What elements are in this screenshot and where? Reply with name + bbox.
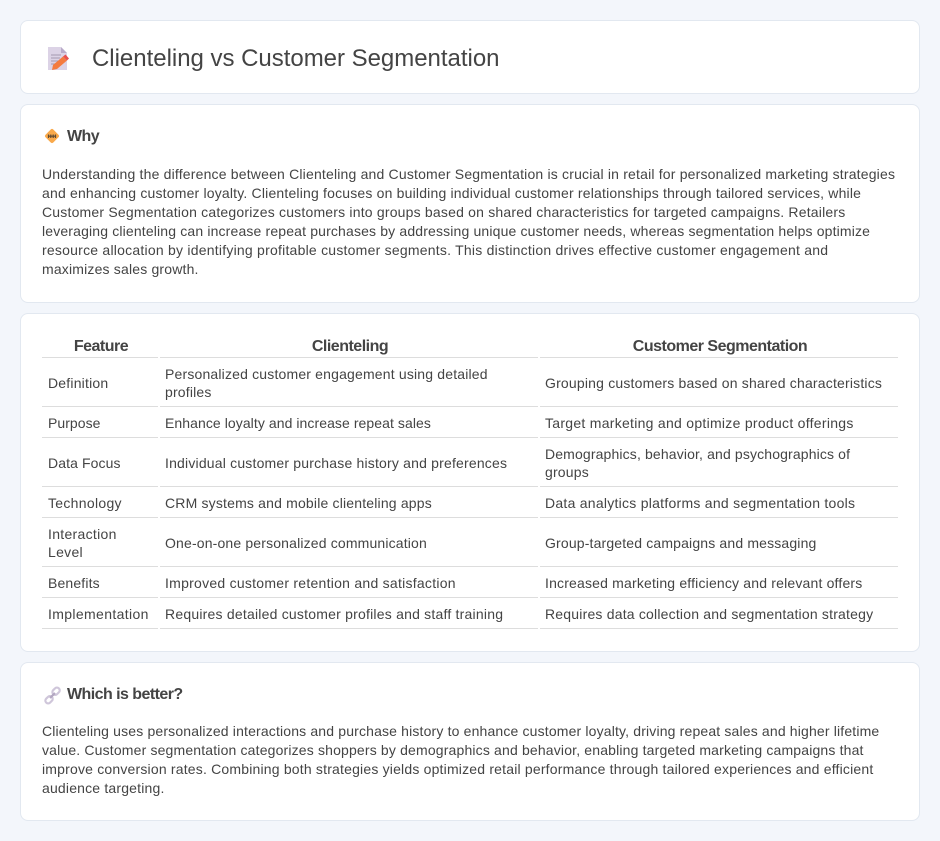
row: benefits: Benefits — [48, 575, 100, 591]
row: interaction level: Group-targeted campaigns and messaging — [545, 535, 816, 551]
row: purpose: Purpose — [48, 415, 100, 431]
panel: why — [20, 104, 920, 303]
row: technology: CRM systems and mobile clienteling apps — [165, 495, 432, 511]
which is better paragraph: audience targeting. — [42, 780, 165, 796]
why paragraph: Understanding the difference between Clienteling and Customer Segmentation is crucial in retail for personalized marketing strategies — [42, 166, 895, 182]
row: data focus — [42, 446, 898, 487]
icon: memo with pencil — [48, 47, 69, 70]
table header row: Customer Segmentation — [633, 338, 807, 355]
why paragraph: resource allocation by identifying profitable customer segments. This distinction drives effective customer engagement and — [42, 242, 828, 258]
row: technology: Technology — [48, 495, 122, 511]
heading: which is better: Which is better? — [67, 686, 183, 703]
row: technology — [42, 495, 898, 518]
row: interaction level: Level — [48, 544, 83, 560]
row: technology: Data analytics platforms and segmentation tools — [545, 495, 855, 511]
row: interaction level: One-on-one personalized communication — [165, 535, 427, 551]
row: purpose: Enhance loyalty and increase repeat sales — [165, 415, 431, 431]
row: definition: Personalized customer engagement using detailed — [165, 366, 488, 382]
title: Clienteling vs Customer Segmentation — [92, 45, 499, 72]
row: purpose — [42, 415, 898, 438]
row: interaction level: Interaction — [48, 526, 117, 542]
which is better paragraph: value. Customer segmentation categorizes shoppers by demographics and behavior, enabling targeted marketing campaigns that — [42, 742, 864, 758]
row: purpose: Target marketing and optimize product offerings — [545, 415, 854, 431]
row: interaction level — [42, 526, 898, 567]
row: data focus: Data Focus — [48, 455, 121, 471]
why paragraph: and enhancing customer loyalty. Clienteling focuses on building individual customer relationships through tailored services, while — [42, 185, 861, 201]
panel: which is better — [20, 662, 920, 821]
icon: warning diamond — [45, 128, 59, 144]
row: implementation: Implementation — [48, 606, 149, 622]
which is better paragraph — [42, 723, 879, 796]
table header row — [42, 338, 898, 358]
why paragraph: leveraging clienteling can increase repeat purchases by addressing unique customer needs, whereas segmentation helps optimize — [42, 223, 870, 239]
row: implementation — [42, 606, 898, 629]
why paragraph: Customer Segmentation categorizes customers into groups based on shared characteristics for targeted campaigns. Retailers — [42, 204, 845, 220]
row: benefits: Increased marketing efficiency and relevant offers — [545, 575, 862, 591]
table header row: Clienteling — [312, 338, 388, 355]
panel: comparison table — [20, 313, 920, 652]
row: benefits: Improved customer retention and satisfaction — [165, 575, 456, 591]
row: implementation: Requires detailed customer profiles and staff training — [165, 606, 503, 622]
row: definition — [42, 366, 898, 407]
heading: why: Why — [67, 128, 99, 145]
row: benefits — [42, 575, 898, 598]
why paragraph: maximizes sales growth. — [42, 261, 199, 277]
which is better paragraph: improve conversion rates. Combining both strategies yields optimized retail performance through tailored experiences and efficient — [42, 761, 873, 777]
icon: link — [44, 686, 61, 704]
why paragraph — [42, 166, 895, 277]
row: definition: Definition — [48, 375, 108, 391]
row: implementation: Requires data collection and segmentation strategy — [545, 606, 873, 622]
header panel — [20, 20, 920, 94]
row: definition: Grouping customers based on shared characteristics — [545, 375, 882, 391]
row: data focus: groups — [545, 464, 589, 480]
row: data focus: Individual customer purchase history and preferences — [165, 455, 507, 471]
row: data focus: Demographics, behavior, and psychographics of — [545, 446, 850, 462]
row: definition: profiles — [165, 384, 212, 400]
which is better paragraph: Clienteling uses personalized interactions and purchase history to enhance customer loyalty, driving repeat sales and higher lifetime — [42, 723, 879, 739]
table header row: Feature — [74, 338, 128, 355]
